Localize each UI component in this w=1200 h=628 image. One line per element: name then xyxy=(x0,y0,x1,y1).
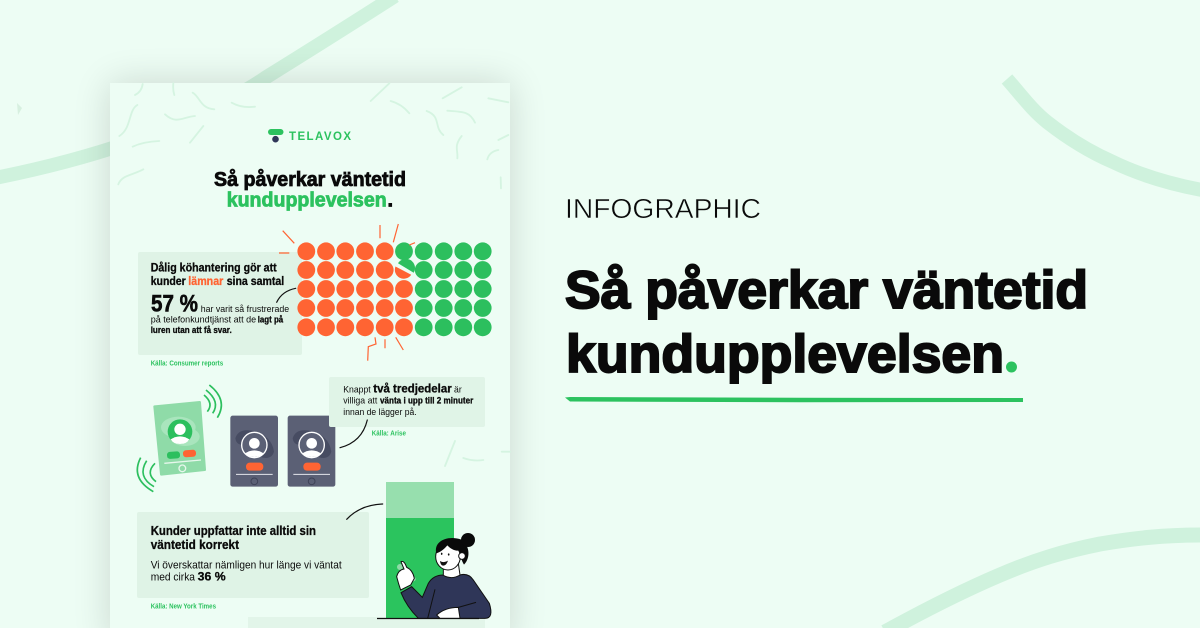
logo: Telavox xyxy=(268,129,351,143)
phones illustration xyxy=(137,385,335,492)
panel: perceived wait xyxy=(137,512,369,598)
title underline xyxy=(565,397,1023,402)
panel: two thirds: är xyxy=(454,385,462,396)
panel: 57 percent xyxy=(138,252,302,355)
panel: two thirds: två tredjedelar xyxy=(373,384,452,396)
card title: kundupplevelsen xyxy=(227,190,387,212)
background swoosh: bottom right xyxy=(885,535,1200,628)
illustration: woman with phone xyxy=(397,533,491,618)
icon: dark phone two xyxy=(288,416,335,487)
card title: . xyxy=(388,190,393,212)
panel body text: 36 % xyxy=(198,570,226,584)
neck xyxy=(443,563,460,578)
panel heading: kunder xyxy=(151,276,186,288)
dot chart: 57 of 100 xyxy=(279,224,492,361)
bar chart: perceived vs actual xyxy=(386,482,454,618)
card shadow xyxy=(110,83,510,628)
panel body text: luren utan att få svar. xyxy=(151,325,232,336)
connector: phones to panel xyxy=(340,420,367,448)
source: New York Times: Källa: New York Times xyxy=(151,604,216,611)
logo: Telavox: TELAVOX xyxy=(289,131,351,143)
green dots xyxy=(395,242,492,336)
panel body text: har varit så frustrerade xyxy=(201,304,289,315)
burst lines xyxy=(279,224,415,361)
panel heading: väntetid korrekt xyxy=(151,538,240,552)
connector: panel to bar xyxy=(347,504,383,519)
panel: two thirds xyxy=(329,377,485,427)
facial features xyxy=(440,553,450,566)
baseline xyxy=(377,618,479,620)
panel heading: Dålig köhantering gör att xyxy=(151,263,277,275)
body xyxy=(401,574,491,618)
clothing lines xyxy=(428,589,476,618)
background swoosh: top right xyxy=(1007,79,1200,190)
panel body text xyxy=(151,304,289,336)
panel body text: lagt på xyxy=(258,314,284,325)
panel body text: med cirka xyxy=(151,572,196,584)
background mark xyxy=(17,103,22,115)
main title: kundupplevelsen xyxy=(566,325,1004,384)
panel: two thirds: Knappt xyxy=(343,385,371,396)
panel: two thirds: vänta i upp till 2 minuter xyxy=(380,395,474,406)
statistic: 57 %: 57 % xyxy=(151,291,198,318)
panel: two thirds: innan de lägger på. xyxy=(343,407,417,418)
decorative squiggles xyxy=(118,83,510,466)
panel heading: Kunder uppfattar inte alltid sin xyxy=(151,524,316,538)
hair xyxy=(436,538,468,565)
panel heading xyxy=(151,524,316,552)
hair bun xyxy=(461,533,475,547)
source: Arise: Källa: Arise xyxy=(372,430,406,437)
ear xyxy=(459,553,465,559)
card title xyxy=(214,168,406,212)
orange dots xyxy=(297,242,413,336)
icon: ringing green phone xyxy=(137,385,221,492)
split dot xyxy=(395,259,415,279)
card title: Så påverkar väntetid xyxy=(214,168,406,191)
panel heading: sina samtal xyxy=(227,276,284,288)
background swoosh: left xyxy=(0,0,395,178)
panel: two thirds: villiga att xyxy=(343,395,378,406)
panel body text xyxy=(151,559,342,584)
main title xyxy=(565,261,1088,384)
resting hand xyxy=(437,607,460,618)
raised hand xyxy=(397,561,414,590)
main title: Så påverkar väntetid xyxy=(565,261,1088,320)
next panel edge xyxy=(248,617,485,628)
face xyxy=(436,543,460,570)
connector: chart to panel xyxy=(277,288,296,302)
panel body text: på telefonkundtjänst att de xyxy=(151,314,256,325)
logo icon xyxy=(268,129,284,142)
source: Consumer reports: Källa: Consumer reports xyxy=(151,361,223,368)
panel heading: lämnar xyxy=(188,276,224,288)
green full stop xyxy=(1006,362,1017,372)
icon: dark phone one xyxy=(230,416,278,487)
infographic card xyxy=(110,83,510,628)
sound waves xyxy=(137,385,221,492)
panel body text: Vi överskattar nämligen hur länge vi väntat xyxy=(151,559,342,571)
panel heading xyxy=(151,263,284,288)
eyebrow: INFOGRAPHIC: INFOGRAPHIC xyxy=(565,193,761,224)
